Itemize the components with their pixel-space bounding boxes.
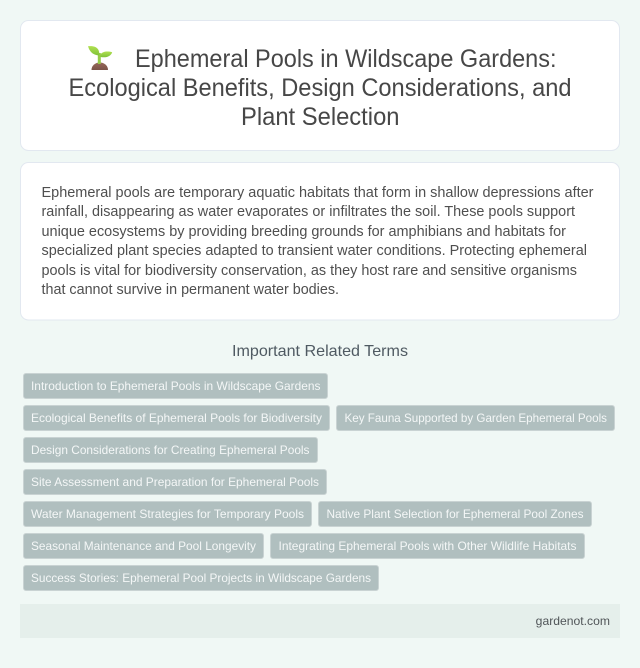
- chip: water management: [24, 502, 312, 526]
- chip: native plant selection: Native Plant Selection for Ephemeral Pool Zones: [326, 507, 584, 521]
- chip: introduction: Introduction to Ephemeral Pools in Wildscape Gardens: [31, 379, 320, 393]
- title: Ephemeral Pools in Wildscape Gardens:: [135, 45, 556, 73]
- chip: site assessment: [24, 470, 326, 494]
- title: Ecological Benefits, Design Considerations, and: [68, 74, 572, 102]
- heading: related terms: Important Related Terms: [232, 343, 408, 360]
- chip: key fauna: Key Fauna Supported by Garden Ephemeral Pools: [344, 411, 607, 425]
- title: [68, 45, 572, 131]
- chip: design considerations: [24, 438, 318, 462]
- chip: seasonal maintenance: [24, 534, 264, 558]
- chip: success stories: Success Stories: Ephemeral Pool Projects in Wildscape Gardens: [31, 571, 371, 585]
- chip: success stories: [24, 566, 378, 590]
- footer: [20, 604, 620, 638]
- chip: key fauna: [336, 406, 614, 430]
- chip: integrating habitats: [270, 534, 584, 558]
- chip: design considerations: Design Considerations for Creating Ephemeral Pools: [31, 443, 310, 457]
- chip: ecological benefits: [24, 406, 330, 430]
- text block: description: that cannot survive in permanent water bodies.: [42, 282, 339, 298]
- footer: gardenot.com: [536, 614, 610, 628]
- text block: description: rainfall, disappearing as water evaporates or infiltrates the soil. These pools support: [42, 204, 575, 220]
- chip: site assessment: Site Assessment and Preparation for Ephemeral Pools: [31, 475, 319, 489]
- chip: native plant selection: [318, 502, 592, 526]
- text block: description: [42, 185, 594, 298]
- panel: description: [20, 162, 620, 320]
- chip: integrating habitats: Integrating Ephemeral Pools with Other Wildlife Habitats: [278, 539, 576, 553]
- text block: description: specialized plant species adapted to transient water conditions. Protecting ephemeral: [42, 243, 587, 259]
- text block: description: unique ecosystems by providing breeding grounds for amphibians and habitats for: [42, 224, 566, 240]
- text block: description: Ephemeral pools are temporary aquatic habitats that form in shallow depressions after: [42, 185, 594, 201]
- chip: water management: Water Management Strategies for Temporary Pools: [31, 507, 304, 521]
- chip: ecological benefits: Ecological Benefits of Ephemeral Pools for Biodiversity: [31, 411, 322, 425]
- text block: description: pools is vital for biodiversity conservation, as they host rare and sensitive organisms: [42, 263, 577, 279]
- term chips: [24, 374, 614, 590]
- panel: header: [20, 20, 620, 150]
- icon: sprout: [88, 46, 112, 70]
- chip: introduction: [24, 374, 328, 398]
- title: Plant Selection: [241, 103, 400, 131]
- chip: seasonal maintenance: Seasonal Maintenance and Pool Longevity: [31, 539, 256, 553]
